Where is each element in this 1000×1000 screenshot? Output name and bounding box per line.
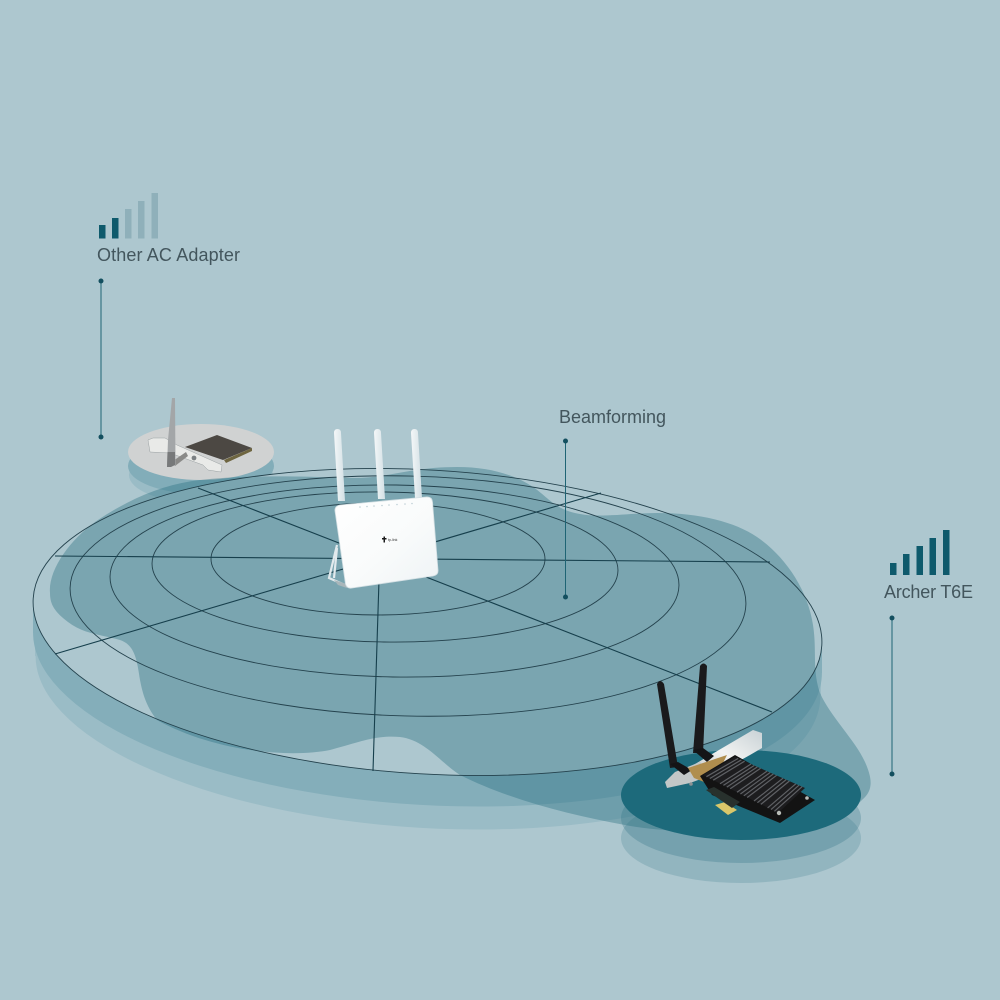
- adapter antenna base: [173, 452, 188, 466]
- t6e gold edge connector: [715, 802, 737, 815]
- router logo: [382, 536, 398, 542]
- label: archer t6e: Archer T6E: [884, 582, 973, 602]
- adapter bracket: [148, 438, 222, 472]
- disk lower shadow: [27, 501, 829, 851]
- t6e gold connector: [688, 755, 727, 782]
- t6e heat sink: [703, 757, 805, 813]
- router leds: [359, 503, 413, 508]
- disk grid spokes: [55, 488, 772, 771]
- adapter hole: [192, 456, 196, 460]
- signal bars: archer t6e: [890, 530, 950, 575]
- icon: wireless router: [329, 429, 438, 588]
- leader line: archer t6e: [890, 616, 894, 776]
- disk top: [24, 447, 831, 797]
- t6e bracket: [690, 730, 762, 780]
- signal bars: other ac adapter: [99, 193, 158, 238]
- adapter circuit board: [185, 435, 252, 460]
- router antennas: [334, 429, 422, 501]
- t6e antenna hinges: [670, 748, 714, 775]
- label: other ac adapter: Other AC Adapter: [97, 245, 240, 265]
- t6e antennas: [657, 664, 707, 768]
- t6e circuit board: [700, 755, 815, 823]
- adapter antenna: [167, 398, 176, 467]
- panel: other adapter platform: [128, 424, 274, 503]
- router stand: [329, 545, 345, 585]
- disk edge band: [24, 478, 831, 828]
- leader line: other ac adapter: [98, 278, 104, 440]
- leader line: beamforming: [563, 438, 568, 600]
- label: beamforming: Beamforming: [559, 407, 666, 427]
- router logo: tp-link: [388, 538, 398, 542]
- beamforming signal blob: [50, 467, 871, 831]
- t6e screws: [777, 811, 781, 815]
- router body: [335, 497, 438, 588]
- icon: other ac adapter card: [148, 398, 252, 472]
- disk grid rings: [24, 447, 831, 797]
- icon: archer t6e card: [657, 664, 815, 823]
- panel: archer t6e platform: [621, 750, 861, 883]
- panel: wireless coverage disk: [24, 447, 871, 851]
